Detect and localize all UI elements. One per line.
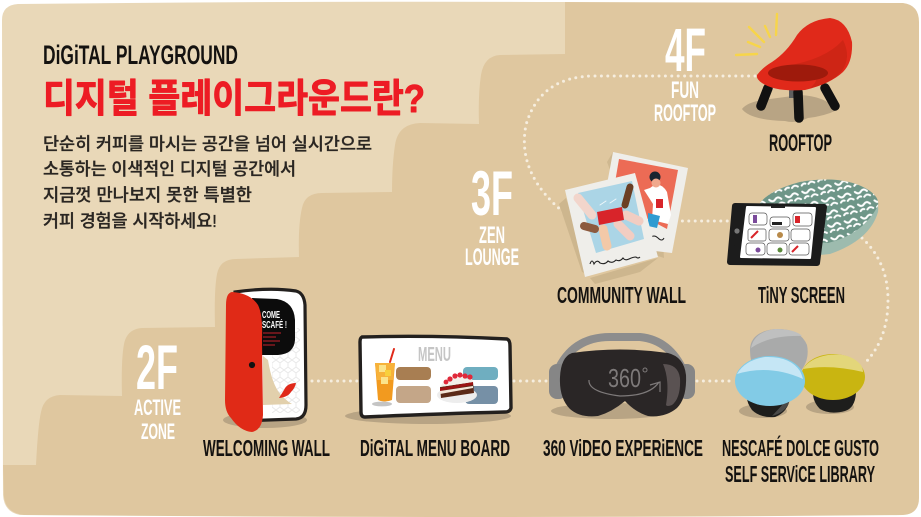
title: Korean headline: 디지털 플레이그라운드란? xyxy=(43,78,425,121)
text block: intro description: 커피 경험을 시작하세요! xyxy=(43,211,217,231)
label: welcoming wall: WELCOMING WALL xyxy=(203,435,330,461)
floor label: 3F zen lounge: 3F xyxy=(471,159,513,229)
icon: coffee capsules xyxy=(735,329,865,418)
floor label: 2F active zone: ACTIVE xyxy=(134,395,181,420)
text block: intro description: 단순히 커피를 마시는 공간을 넘어 실시간으로 xyxy=(43,134,372,154)
floor label: 4F fun rooftop xyxy=(654,16,716,127)
floor label: 4F fun rooftop: ROOFTOP xyxy=(654,100,716,127)
floor label: 2F active zone: 2F xyxy=(136,333,178,403)
text block: intro description: 지금껏 만나보지 못한 특별한 xyxy=(43,185,252,205)
label: tiny screen: TiNY SCREEN xyxy=(758,282,845,308)
label: rooftop: ROOFTOP xyxy=(769,130,832,157)
floor label: 2F active zone: ZONE xyxy=(141,419,175,444)
icon: VR headset: 360 xyxy=(608,363,641,393)
icon: digital menu board: MENU xyxy=(418,344,451,366)
text block: intro description: 소통하는 이색적인 디지털 공간에서 xyxy=(43,159,296,179)
icon: tablet on pillow xyxy=(730,180,878,263)
label: community wall: COMMUNITY WALL xyxy=(557,282,686,308)
dotted route: community wall to tiny screen xyxy=(676,220,728,222)
label: Nescafé Dolce Gusto self service library xyxy=(722,434,879,487)
icon: red chair xyxy=(736,14,852,122)
icon: welcoming wall kiosk xyxy=(223,289,307,432)
floor label: 3F zen lounge: LOUNGE xyxy=(465,244,519,271)
text block: intro description xyxy=(43,134,372,231)
dotted route: menu board to VR xyxy=(514,380,548,382)
dotted route: tiny screen to capsules xyxy=(862,238,888,364)
icon: welcoming wall kiosk: COME xyxy=(262,310,280,321)
dotted route: rooftop to community wall xyxy=(524,76,755,215)
floor label: 4F fun rooftop: 4F xyxy=(665,16,706,84)
label: digital menu board: DiGiTAL MENU BOARD xyxy=(360,435,510,461)
panel: light background xyxy=(2,2,570,516)
heading: Digital Playground: DiGiTAL PLAYGROUND xyxy=(43,40,238,70)
floor label: 3F zen lounge xyxy=(465,159,519,271)
dotted route: VR to capsules xyxy=(697,380,735,382)
icon: VR headset xyxy=(549,337,695,419)
floor label: 4F fun rooftop: FUN xyxy=(671,77,699,104)
dotted route: welcoming wall to menu board xyxy=(312,380,358,382)
label: 360 video experience: 360 ViDEO EXPERiENCE xyxy=(543,435,703,461)
icon: welcoming wall kiosk: SCAFÉ ! xyxy=(262,318,287,331)
icon: digital menu board xyxy=(345,336,511,424)
floor label: 2F active zone xyxy=(134,333,181,444)
floor label: 3F zen lounge: ZEN xyxy=(479,222,505,249)
icon: polaroid photos xyxy=(559,152,688,284)
